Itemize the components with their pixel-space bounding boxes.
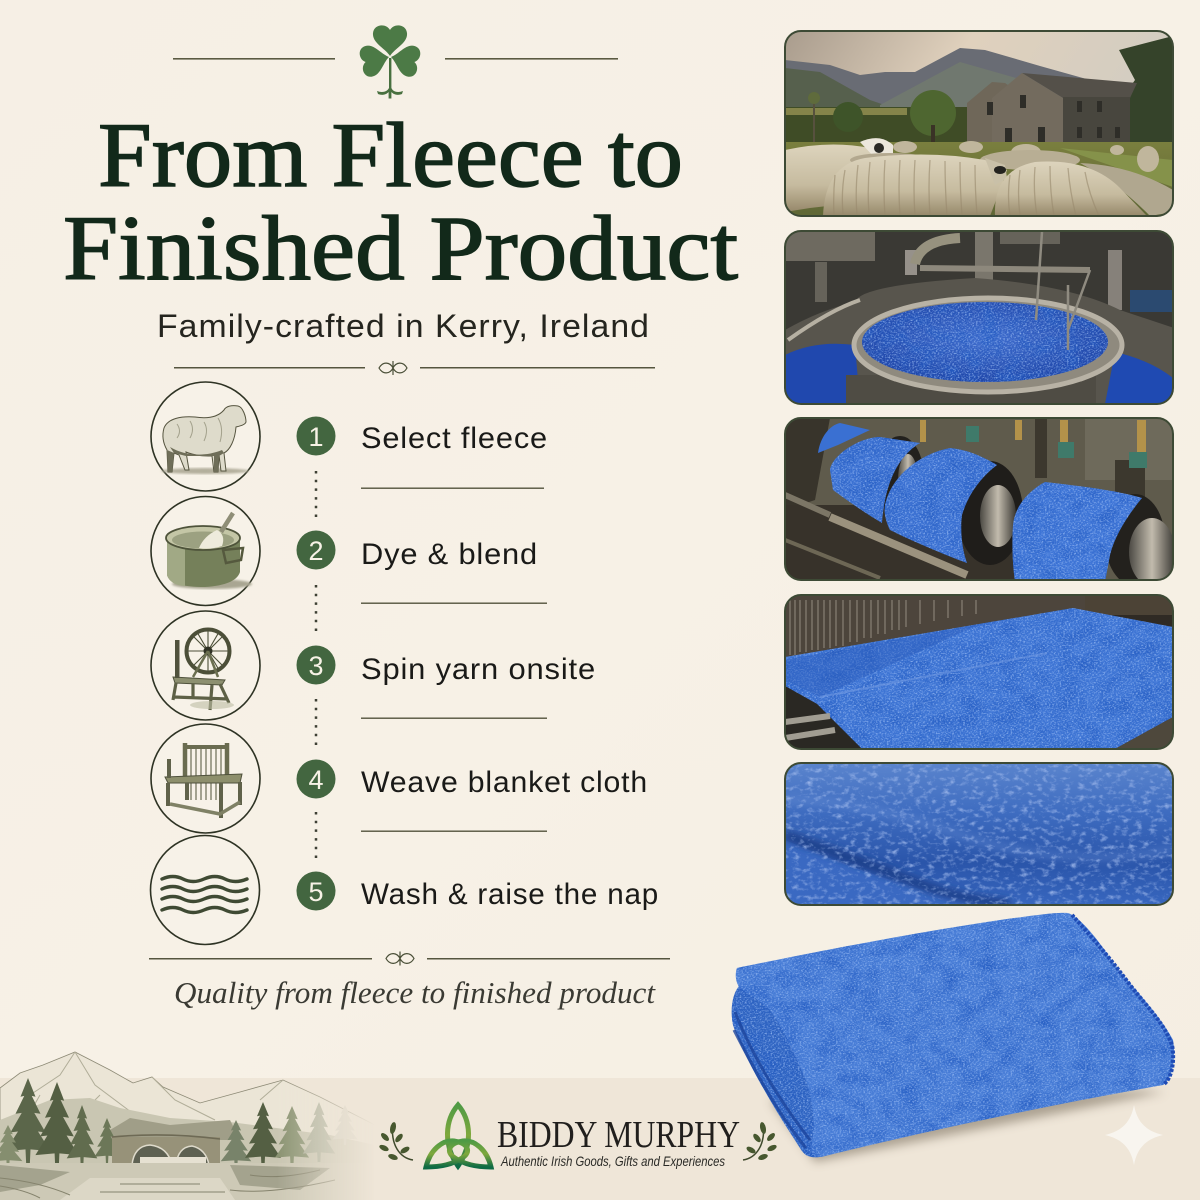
lower divider [149, 952, 670, 966]
divider under subtitle [174, 361, 655, 375]
icon: triquetra knot [426, 1105, 491, 1167]
wordmark: BIDDY MURPHY [497, 1114, 740, 1156]
icon: shamrock [358, 25, 422, 98]
sprig right [743, 1122, 778, 1161]
title: From Fleece to [98, 104, 683, 206]
step 2: dye and blend [151, 496, 547, 606]
step label 3: Spin yarn onsite [361, 653, 596, 686]
step number 4 [296, 760, 336, 798]
step number 2 [296, 530, 336, 570]
title [63, 104, 738, 299]
icon: loom [151, 724, 260, 833]
top ornament: shamrock with rules [173, 25, 618, 98]
step label 5: Wash & raise the nap [361, 878, 659, 911]
step 3: spin yarn [151, 611, 596, 720]
photo: sheep and stone mill [785, 31, 1173, 216]
dotted connectors [315, 471, 317, 859]
photo: yarn spools [785, 418, 1175, 586]
panel: process steps [150, 382, 659, 944]
photo: dye vat [785, 231, 1180, 404]
tagline: Quality from fleece to finished product [174, 975, 656, 1010]
step label 4: Weave blanket cloth [361, 766, 648, 799]
icon: sparkle [1105, 1105, 1163, 1165]
step number 1: 1 [308, 422, 324, 452]
step number 5 [296, 872, 336, 910]
step 1: select fleece [151, 382, 548, 491]
step number 3 [296, 646, 336, 684]
step number 2: 2 [308, 536, 324, 566]
photo: loom cloth [785, 595, 1173, 750]
icon: water waves [150, 836, 260, 944]
sprig left [378, 1122, 413, 1161]
icon: dye tub [151, 496, 260, 606]
step number 3: 3 [308, 651, 324, 681]
step number 5: 5 [308, 877, 324, 907]
icon: spinning wheel [151, 611, 260, 720]
icon: sheep [151, 382, 260, 491]
step label 1: Select fleece [361, 422, 548, 455]
footer landscape illustration [0, 1052, 375, 1200]
strapline: Authentic Irish Goods, Gifts and Experiences [500, 1153, 725, 1169]
title: Finished Product [63, 197, 738, 299]
photo: cloth close-up [785, 763, 1173, 905]
subtitle: Family-crafted in Kerry, Ireland [157, 308, 650, 344]
step 5: wash [150, 836, 659, 944]
step number 1 [296, 416, 336, 456]
step number 4: 4 [308, 765, 324, 795]
logo: Biddy Murphy [378, 1105, 778, 1169]
step label 2: Dye & blend [361, 538, 538, 571]
step 4: weave [151, 724, 648, 833]
folded blue blanket [732, 913, 1174, 1162]
